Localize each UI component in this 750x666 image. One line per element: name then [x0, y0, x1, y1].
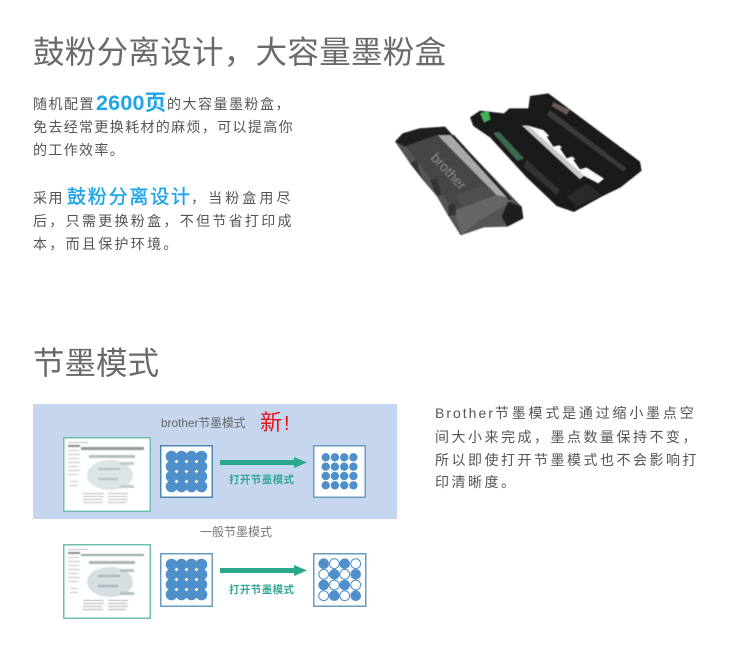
- dot box: before, general mode: [160, 553, 213, 607]
- arrow: general mode: [220, 565, 307, 576]
- text block: 2600 page toner: 免去经常更换耗材的麻烦，可以提高你: [33, 119, 294, 135]
- drum unit: [470, 93, 642, 212]
- text block: economy mode explanation: 所以即使打开节墨模式也不会影响打: [435, 452, 699, 468]
- text block: drum separation design: 后，只需更换粉盒，不但节省打印成: [33, 213, 294, 229]
- toner cartridge: [395, 127, 523, 235]
- text block: drum separation design: 鼓粉分离设计: [67, 187, 192, 208]
- label: general economy mode: 一般节墨模式: [200, 525, 272, 539]
- text block: 2600 page toner: 的大容量墨粉盒，: [167, 96, 291, 112]
- document thumbnail: general mode: [63, 544, 151, 619]
- dot box: after, brother mode: [313, 445, 366, 498]
- dot box: before, brother mode: [160, 445, 213, 498]
- text block: 2600 page toner: [33, 91, 294, 158]
- text block: 2600 page toner: 的工作效率。: [33, 142, 125, 158]
- text block: 2600 page toner: 2600页: [96, 91, 166, 115]
- text block: economy mode explanation: [435, 405, 699, 490]
- arrow label: turn on economy mode: 打开节墨模式: [229, 584, 294, 596]
- arrow: brother mode: [220, 457, 307, 468]
- arrow label: turn on economy mode: 打开节墨模式: [229, 474, 294, 486]
- heading: economy mode: 节墨模式: [33, 345, 159, 381]
- new badge: 新!: [260, 410, 290, 435]
- text block: drum separation design: 采用: [33, 190, 64, 206]
- text block: economy mode explanation: 印清晰度。: [435, 474, 518, 490]
- label: brother economy mode: brother节墨模式: [161, 416, 246, 430]
- document thumbnail: brother mode: [63, 437, 151, 512]
- title: toner separation: 鼓粉分离设计，大容量墨粉盒: [33, 34, 446, 70]
- image: toner cartridge and drum unit: [394, 92, 642, 236]
- panel: brother economy mode: [33, 404, 397, 519]
- dot box: after, general mode: [313, 553, 366, 607]
- text block: 2600 page toner: 随机配置: [33, 96, 95, 112]
- text block: drum separation design: [33, 186, 294, 252]
- text block: economy mode explanation: Brother节墨模式是通过缩小墨点空: [435, 405, 697, 421]
- text block: drum separation design: ，当粉盒用尽: [191, 190, 294, 206]
- toner cartridge: brother: [428, 149, 470, 193]
- text block: economy mode explanation: 间大小来完成，墨点数量保持不变，: [435, 429, 699, 445]
- text block: drum separation design: 本，而且保护环境。: [33, 236, 180, 252]
